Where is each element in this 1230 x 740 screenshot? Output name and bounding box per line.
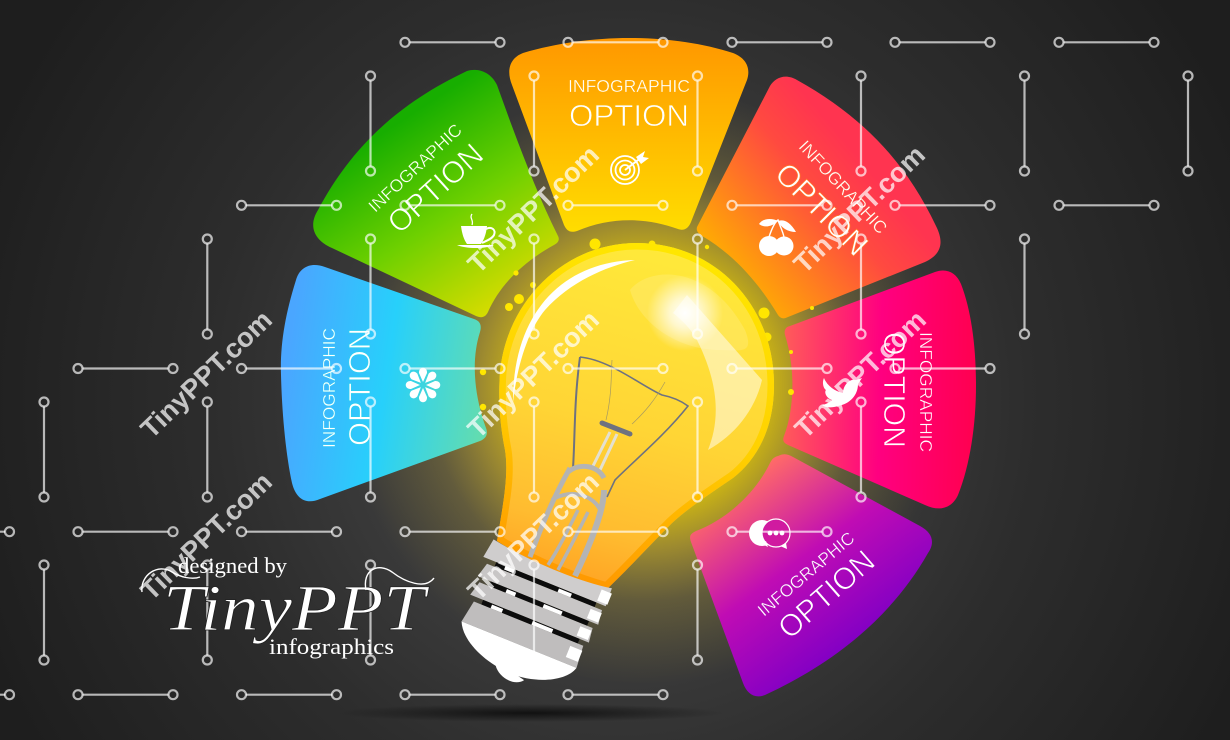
soft reflection [630,275,748,350]
lightbulb [444,243,774,704]
text: green option label: INFOGRAPHIC [364,120,466,216]
text: pink option label: INFOGRAPHIC [916,332,936,452]
bulb glass [497,243,774,589]
icon: cherries [759,219,796,256]
bulb rim [497,243,774,589]
text: yellow option label: INFOGRAPHIC [568,76,690,96]
text: red option title: OPTION [768,156,875,263]
logo: infographics: infographics [269,634,394,659]
logo: swash strokes [142,568,434,592]
highlight: right reflection [673,295,762,450]
watermarks [135,140,932,606]
filament [530,357,688,576]
watermarks: TinyPPT.com [462,305,605,444]
logo: designed by TinyPPT infographics [142,553,434,659]
panel: purple option [690,454,932,696]
icon: flower [406,368,440,402]
icon: target [611,151,649,184]
text: blue option label: INFOGRAPHIC [319,328,339,448]
watermarks: TinyPPT.com [788,140,931,279]
watermarks: TinyPPT.com [789,305,932,444]
panel: blue option [281,265,487,501]
text: purple option label: INFOGRAPHIC [754,528,858,620]
text: green option title: OPTION [381,137,490,240]
bulb glow [345,85,945,685]
panel: green option [313,70,559,317]
highlight: left crescent [513,260,635,402]
logo: designed by: designed by [178,553,287,578]
floor shadow [335,704,725,722]
watermarks: TinyPPT.com [462,467,605,606]
watermarks: TinyPPT.com [135,305,278,444]
text: purple option title: OPTION [771,543,882,646]
logo: TinyPPT script: TinyPPT [163,572,430,645]
highlight: bright spot [647,275,723,351]
watermarks: TinyPPT.com [135,467,278,606]
text: red option label: INFOGRAPHIC [795,136,891,238]
panel: red option [697,77,941,318]
text: blue option title: OPTION [342,328,377,446]
icon: bird [822,378,862,407]
panel: pink option [783,270,976,508]
decorative dots around bulb [480,238,814,410]
screw base [444,538,614,704]
panel: yellow option [509,38,748,232]
text: pink option title: OPTION [877,332,912,448]
icon: speech bubbles [749,519,790,549]
watermarks: TinyPPT.com [462,140,605,279]
text: yellow option title: OPTION [569,98,689,133]
icon: coffee cup [457,214,495,248]
